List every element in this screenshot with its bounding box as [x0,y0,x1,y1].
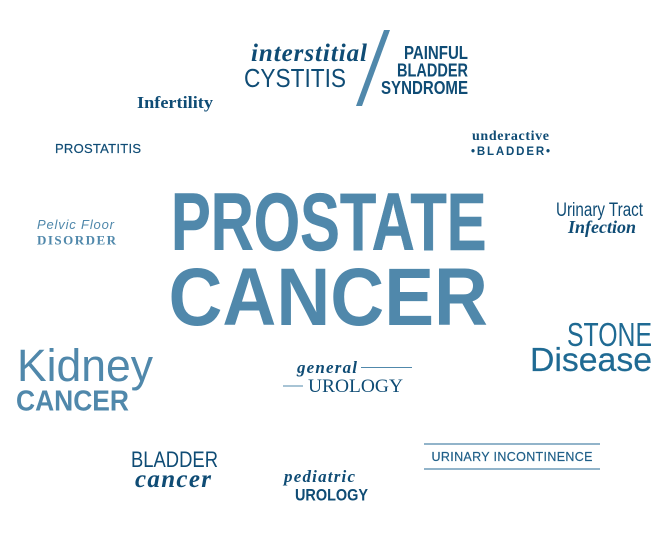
main heading: prostate cancer [168,177,488,343]
label: pelvic floor disorder: Pelvic Floor [37,217,115,232]
heading: interstitial cystitis: interstitial [251,40,367,67]
label: general urology: general [296,358,357,377]
label: underactive bladder: •BLADDER• [471,146,550,158]
main heading: prostate cancer: PROSTATE [171,177,486,268]
label: pediatric urology [282,467,368,504]
heading: interstitial cystitis: CYSTITIS [244,63,346,93]
label: stone disease: Disease [530,341,652,378]
label: stone disease [530,316,652,378]
label: urinary tract infection: Infection [567,217,636,237]
label: general urology: UROLOGY [308,377,403,397]
heading: interstitial cystitis [244,40,367,93]
heading: painful bladder syndrome [381,43,468,98]
label: prostatitis: PROSTATITIS [55,141,141,156]
label: urinary incontinence: URINARY INCONTINENCE [432,450,592,464]
label: urinary tract infection [556,200,644,237]
label: bladder cancer: BLADDER [131,447,218,472]
label: underactive bladder [471,129,550,158]
heading: painful bladder syndrome: PAINFUL [404,43,468,63]
label: infertility: Infertility [137,93,214,112]
label: pelvic floor disorder: DISORDER [37,232,117,248]
label: general urology [283,358,412,397]
label: pelvic floor disorder [37,217,117,248]
label: urinary tract infection: Urinary Tract [556,200,644,221]
label: pediatric urology: pediatric [282,467,355,486]
heading: painful bladder syndrome: SYNDROME [381,78,468,98]
label: bladder cancer [131,447,218,493]
label: kidney cancer: CANCER [16,386,129,418]
main heading: prostate cancer: CANCER [168,252,488,343]
heading: painful bladder syndrome: BLADDER [397,60,468,80]
slash divider [356,30,390,106]
label: kidney cancer: Kidney [17,340,153,391]
label: pediatric urology: UROLOGY [295,486,368,504]
label: kidney cancer [16,340,153,418]
label: underactive bladder: underactive [472,129,549,144]
label: bladder cancer: cancer [135,466,211,493]
